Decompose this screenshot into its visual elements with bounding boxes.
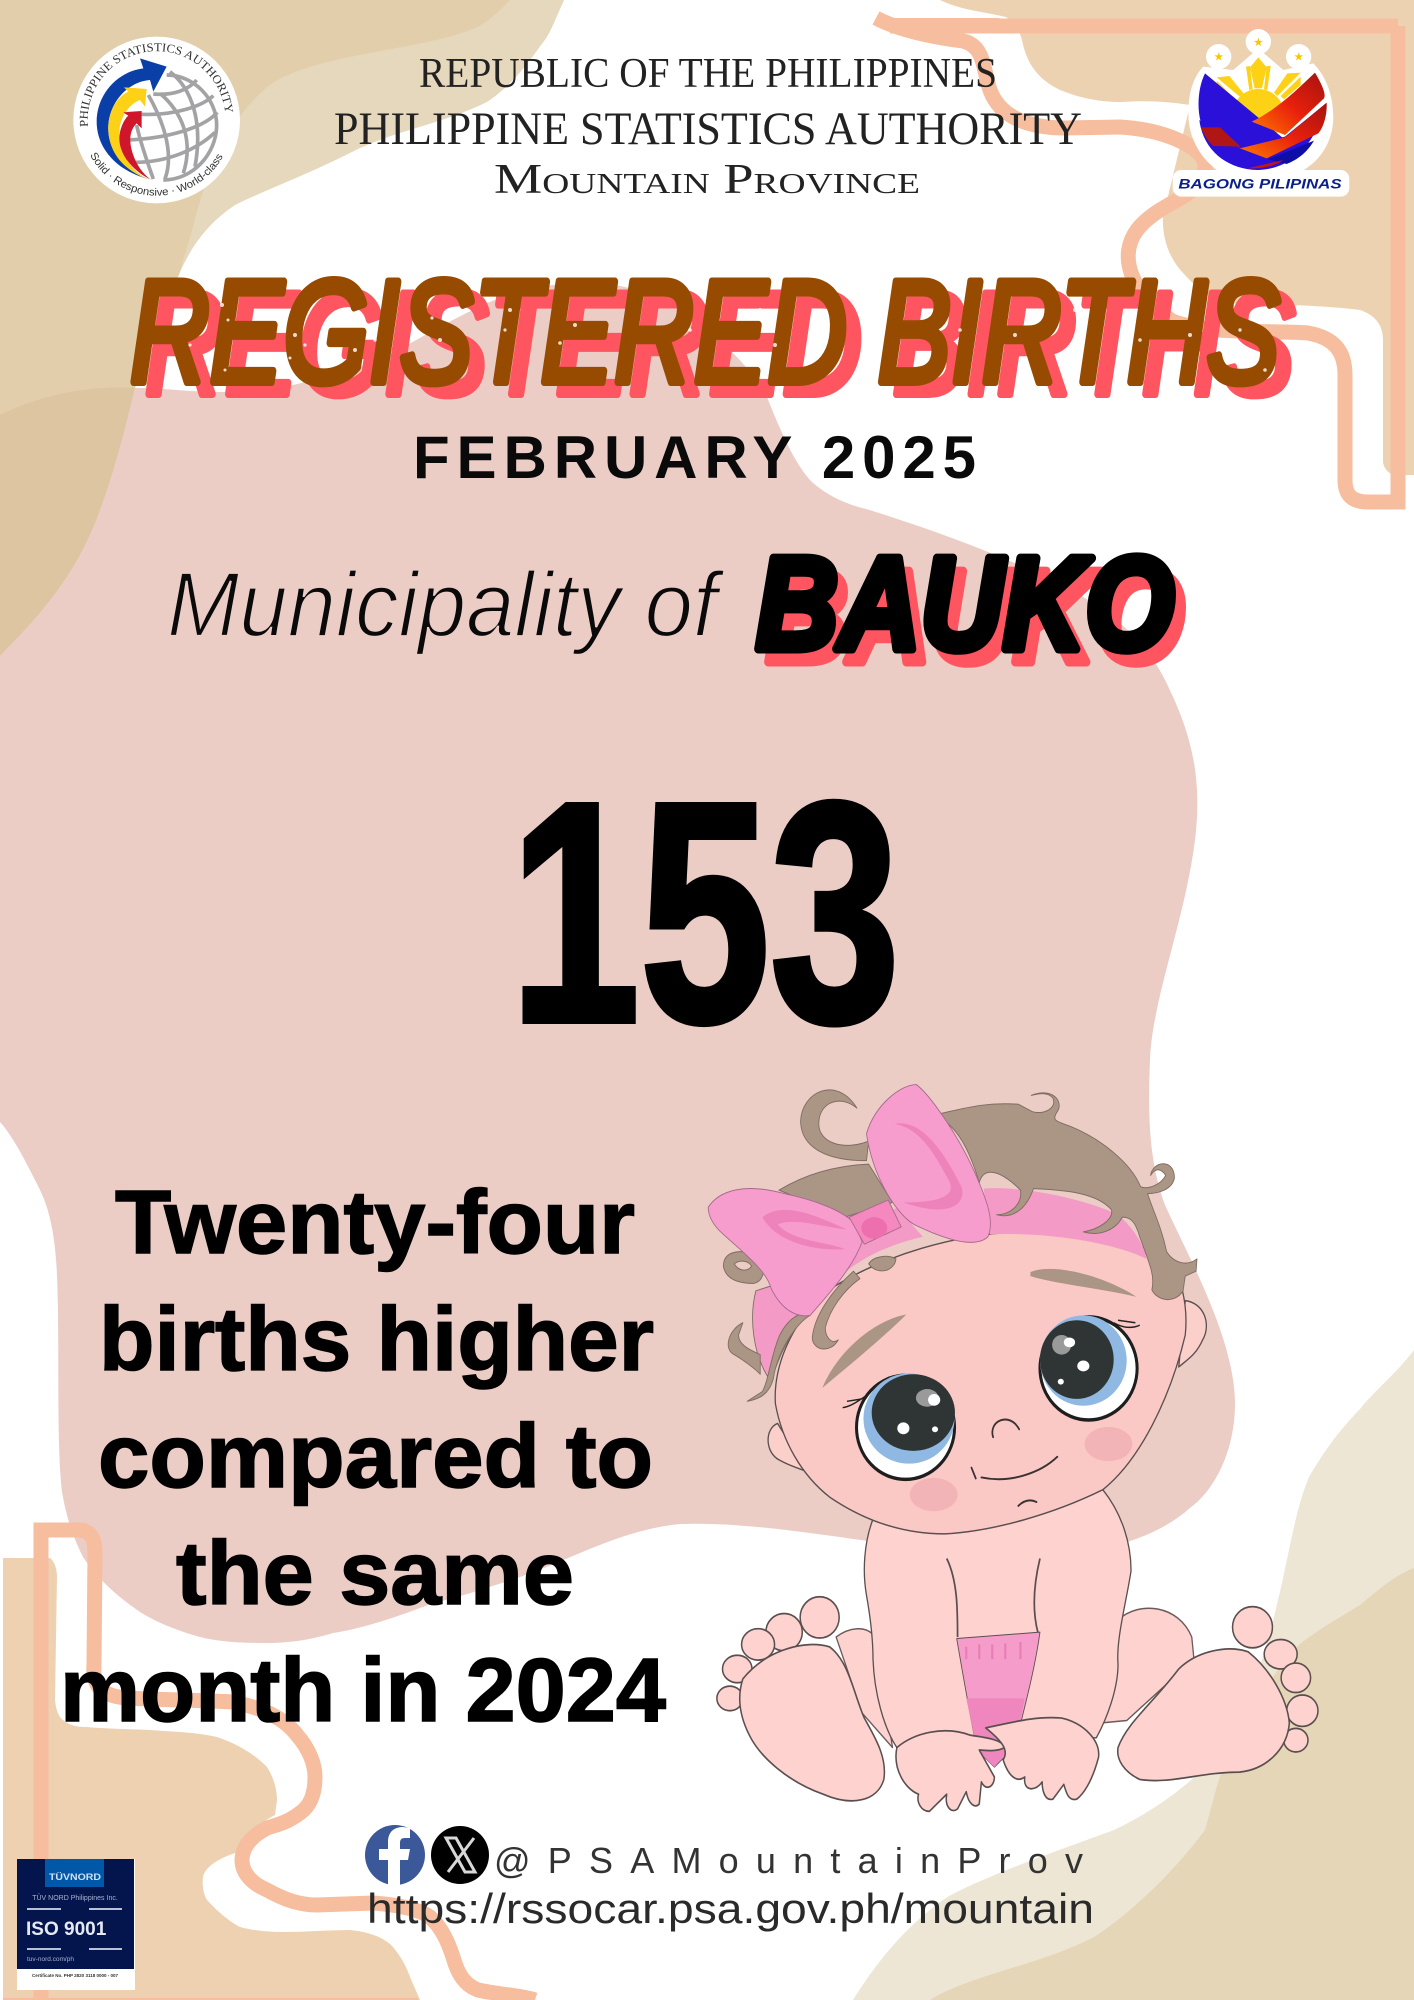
comparison statement: the same <box>176 1524 574 1624</box>
baby legs <box>836 1608 1194 1748</box>
emblem wordmark: BAGONG PILIPINAS <box>1178 176 1342 191</box>
background: bottom-right beige shapes <box>853 1350 1414 2000</box>
date: february 2025: FEBRUARY 2025 <box>413 424 976 491</box>
badge: ISO 9001 certification: TÜVNORD <box>49 1872 101 1883</box>
badge: ISO 9001 certification <box>17 1859 135 1990</box>
comparison statement: births higher <box>99 1290 654 1390</box>
baby face <box>775 1232 1186 1534</box>
background: top-left beige shapes <box>0 0 564 656</box>
header: republic line: REPUBLIC OF THE PHILIPPINES <box>419 51 997 97</box>
emblem bowl <box>1199 103 1326 170</box>
comparison statement: compared to <box>98 1407 653 1507</box>
background: top-right beige shape <box>940 0 1414 475</box>
comparison statement: Twenty-four <box>115 1173 635 1273</box>
emblem stars <box>1214 37 1304 64</box>
comparison statement: month in 2024 <box>60 1641 666 1741</box>
comparison statement <box>60 1173 666 1741</box>
icon: x <box>431 1826 489 1884</box>
badge: ISO 9001 certification: TÜV NORD Philippines Inc. <box>32 1894 118 1902</box>
illustration: baby girl <box>708 1085 1318 1811</box>
baby hair back <box>779 1164 893 1217</box>
website url: https://rssocar.psa.gov.ph/mountain <box>367 1885 1094 1932</box>
baby hands <box>896 1718 1099 1811</box>
badge: ISO 9001 certification: ISO 9001 <box>26 1919 107 1940</box>
baby hair front <box>723 1090 1197 1401</box>
emblem swooshes <box>1199 73 1283 148</box>
seal globe <box>128 72 217 180</box>
baby left eye <box>843 1373 955 1479</box>
emblem stars: ★ <box>1214 52 1224 64</box>
baby arm creases <box>947 1558 1040 1637</box>
baby ears <box>768 1301 1206 1475</box>
seal arrows <box>97 58 167 180</box>
header: authority line: PHILIPPINE STATISTICS AUTHORITY <box>334 103 1082 155</box>
baby bow <box>708 1085 990 1316</box>
baby right eye <box>1040 1315 1140 1420</box>
municipality name: Bauko: BAUKO <box>756 530 1174 677</box>
icon: facebook <box>365 1825 425 1885</box>
emblem stars: ★ <box>1253 37 1263 49</box>
seal ring text: PHILIPPINE STATISTICS AUTHORITY <box>80 43 234 127</box>
seal motto: Solid · Responsive · World-class <box>91 152 222 196</box>
badge: ISO 9001 certification: Certificate No. PHP 2820 3118 0000 - 007 <box>32 1973 118 1978</box>
emblem stars: ★ <box>1294 52 1304 64</box>
logo: Bagong Pilipinas <box>1173 29 1349 197</box>
baby nose and mouth <box>971 1420 1057 1506</box>
baby eyebrows <box>822 1269 1136 1388</box>
baby torso <box>864 1490 1131 1748</box>
header: province line: Mountain Province <box>494 157 920 203</box>
logo: Philippine Statistics Authority seal <box>73 36 240 204</box>
big number: 153 births: 153 <box>510 737 900 1088</box>
baby diaper <box>957 1632 1040 1767</box>
badge: ISO 9001 certification: tuv-nord.com/ph <box>27 1956 74 1963</box>
municipality label: Municipality of <box>167 554 725 656</box>
social handle: @PSAMountainProv <box>494 1840 1083 1881</box>
baby cheeks <box>910 1427 1132 1511</box>
baby left foot <box>717 1597 884 1801</box>
municipality name: Bauko: BAUKO <box>766 543 1184 690</box>
background: bottom-left beige shape <box>3 1558 420 2000</box>
decorative peach line: top right <box>876 18 1398 502</box>
emblem sun <box>1217 57 1301 141</box>
decorative peach line: bottom left <box>3 1530 535 2000</box>
background: central pink blob <box>0 283 1235 1643</box>
baby headband <box>753 1188 1146 1382</box>
baby right foot <box>1118 1607 1318 1781</box>
